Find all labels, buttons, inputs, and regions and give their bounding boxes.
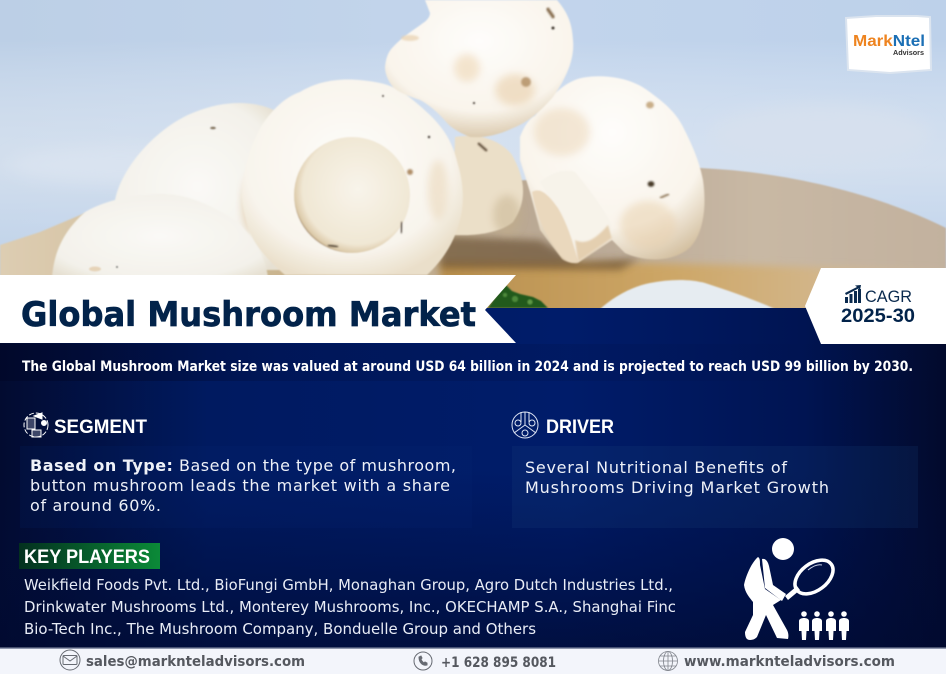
photo: mushrooms on a wooden board	[0, 0, 946, 308]
back-left mushroom	[115, 103, 280, 270]
right mushroom	[520, 76, 705, 263]
footer bar	[0, 648, 946, 674]
background: navy panel	[0, 308, 946, 648]
segment text	[30, 456, 456, 515]
key players list: Bio-Tech Inc., The Mushroom Company, Bonduelle Group and Others	[24, 620, 536, 638]
logo: MarkNtel Advisors	[846, 16, 931, 73]
white bowl	[600, 280, 775, 309]
icon: segment globe	[24, 413, 48, 437]
panel: driver	[512, 412, 918, 528]
small people	[799, 611, 849, 640]
title: Global Mushroom Market	[21, 295, 476, 335]
driver text	[525, 458, 829, 497]
driver heading: DRIVER	[546, 417, 614, 438]
icon: person with magnifying glass over small people	[744, 538, 849, 640]
website: www.marknteladvisors.com	[684, 654, 895, 670]
parsley garnish	[488, 285, 548, 308]
key players heading: KEY PLAYERS	[24, 546, 150, 568]
CAGR years: 2025-30	[841, 306, 915, 327]
logo: MarkNtel Advisors: MarkNtel	[853, 33, 925, 50]
CAGR label: CAGR	[865, 287, 912, 306]
key players list: Drinkwater Mushrooms Ltd., Monterey Mushrooms, Inc., OKECHAMP S.A., Shanghai Finc	[24, 598, 676, 616]
driver text: Several Nutritional Benefits of	[525, 458, 787, 477]
segment heading: SEGMENT	[54, 417, 147, 438]
back small mushroom	[452, 136, 523, 235]
logo: MarkNtel Advisors: Advisors	[893, 50, 924, 57]
key players list	[24, 576, 676, 638]
icon: web globe	[658, 652, 678, 670]
key players list: Weikfield Foods Pvt. Ltd., BioFungi GmbH, Monaghan Group, Agro Dutch Industries Ltd.,	[24, 576, 673, 594]
top mushroom	[385, 0, 573, 137]
segment text: Based on Type: Based on the type of mushroom,	[30, 456, 456, 475]
icon: email	[60, 650, 80, 670]
email: sales@marknteladvisors.com	[86, 654, 305, 670]
phone: +1 628 895 8081	[441, 655, 556, 671]
icon: rising bar chart	[845, 285, 861, 303]
segment text: button mushroom leads the market with a share	[30, 476, 450, 495]
icon: driver network	[512, 412, 538, 438]
icon: phone	[414, 652, 432, 670]
front-left mushroom	[52, 194, 268, 278]
driver text: Mushrooms Driving Market Growth	[525, 478, 829, 497]
title ribbon	[0, 275, 516, 343]
panel: segment	[20, 413, 472, 528]
central mushroom with stem	[242, 80, 463, 275]
segment text: of around 60%.	[30, 496, 161, 515]
CAGR badge	[805, 268, 946, 344]
